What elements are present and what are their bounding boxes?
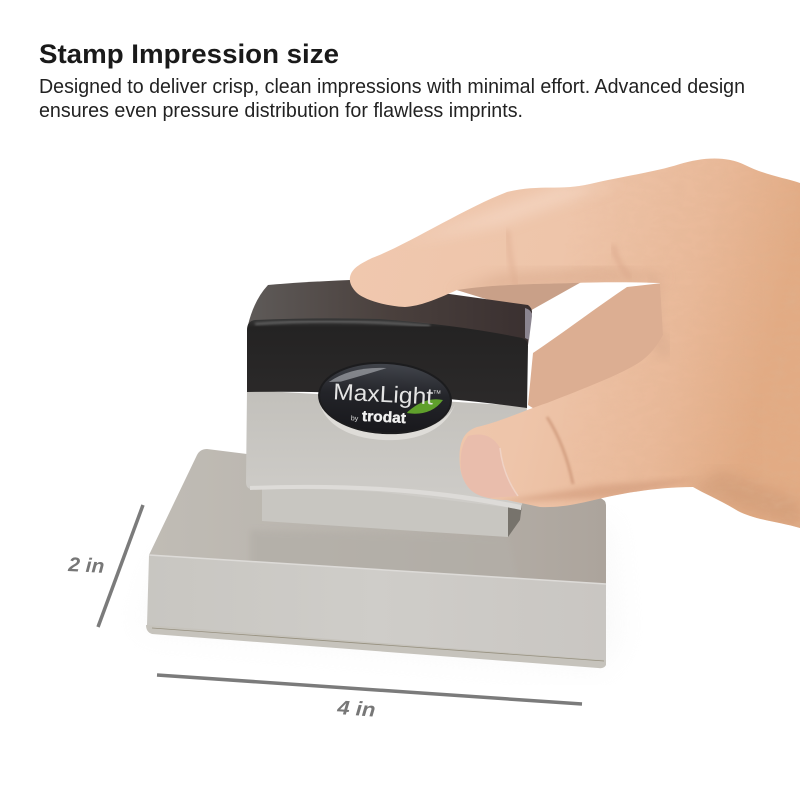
dimension label: 2 in: 2 in [67,554,105,578]
infographic canvas [40,44,800,716]
stamp handle [246,280,532,510]
soft shadow [140,520,620,670]
description text [39,76,745,122]
gray lower body [246,390,527,509]
base bottom lip [146,625,606,668]
hand [350,150,800,550]
base front face [147,555,606,666]
stamp neck [262,480,522,537]
thumb and finger creases [547,417,573,484]
base top face [149,449,606,584]
top lid [248,280,532,345]
description text: ensures even pressure distribution for flawless imprints. [39,100,523,122]
logo badge: trodat [362,408,406,427]
dimension label: 4 in: 4 in [336,697,376,722]
dimension line: width [157,675,582,704]
title: Stamp Impression size [39,39,339,69]
stamp base [146,449,606,668]
logo badge [316,360,458,444]
logo badge: by [351,415,359,423]
hand shading [473,267,637,288]
description text: Designed to deliver crisp, clean impressions with minimal effort. Advanced design [39,76,745,98]
logo rim [316,394,456,444]
dimension line: height [98,505,143,627]
fingers behind stamp [450,280,690,425]
thumbnail [461,434,518,498]
black band [247,318,528,408]
logo badge: TM [433,390,441,396]
logo wordmark: MaxLight [333,378,434,410]
